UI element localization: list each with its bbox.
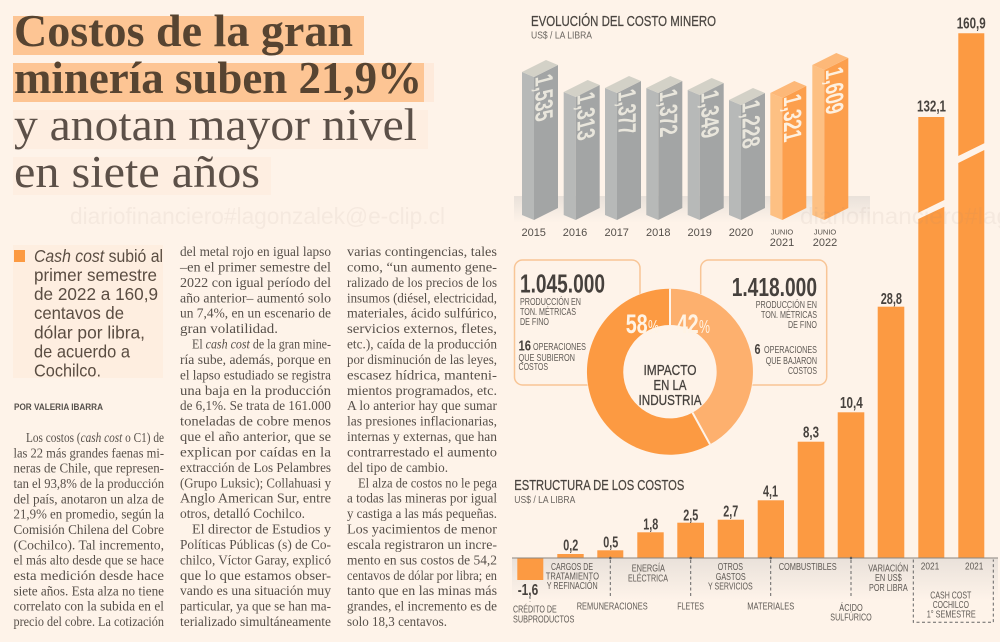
callout: cash cost: dólar por libra,: [34, 322, 145, 342]
bar: junio 2021: [770, 81, 806, 249]
segment: 42%: [670, 289, 753, 444]
body text: column 2: terializado simultáneamente: [180, 614, 331, 629]
title: en siete años: [14, 147, 260, 197]
bar: ácido sulfúrico: ÁCIDO: [839, 601, 863, 614]
bar: junio 2021: JUNIO: [771, 228, 793, 236]
bar: 2016: 2016: [563, 227, 587, 239]
bar: otros gastos y servicios: Y SERVICIOS: [708, 581, 753, 592]
bar: remuneraciones: [577, 534, 648, 612]
callout: cash cost: Cash cost subió al: [34, 246, 163, 266]
dashed bracket: cash cost cochilco: COCHILCO: [933, 600, 969, 611]
callout: cash cost: centavos de: [34, 303, 124, 323]
bar: junio 2022: [812, 53, 848, 249]
subheading: US$ / LA LIBRA: [531, 30, 592, 42]
segment: 58%: [587, 289, 710, 455]
bar: variación en US$ por libra: VARIACIÓN: [868, 562, 908, 575]
body text: column 3: escasez hídrica, manteni-: [347, 367, 498, 382]
body text: column 3: grandes, el incremento es de: [347, 599, 497, 614]
bar: cargos de tratamiento: Y REFINACIÓN: [547, 579, 598, 592]
body text: column 3: internas y externas, que han: [347, 429, 497, 444]
bar: 2020: 1,228: [737, 97, 764, 152]
bar: cash cost 2021: [917, 99, 946, 572]
byline: POR VALERIA IBARRA: [14, 402, 103, 412]
body text: column 1: del país, anotaron un alza de: [14, 491, 164, 506]
body text: column 1: esta medición desde hace: [14, 568, 164, 583]
bar: materiales: 4,1: [763, 484, 778, 501]
callout: cash cost: de 2022 a 160,9: [34, 284, 158, 304]
body text: column 3: por disminución de las leyes,: [347, 352, 497, 367]
body text: column 3: del tipo de cambio.: [347, 460, 448, 475]
bar: cargos de tratamiento: 0,2: [563, 538, 578, 555]
bar: 2015: [521, 60, 558, 239]
bar: otros gastos y servicios: [708, 504, 753, 592]
body text: column 2: el lapso estudiado se registra: [180, 367, 331, 382]
body text: column 3: ralizado de los precios de los: [347, 275, 497, 290]
bar: 2020: [729, 88, 765, 239]
bar: 2020: 2020: [729, 227, 753, 239]
body text: column 2: que lo que estamos obser-: [180, 568, 332, 583]
body text: column 2: ría sube, además, porque en: [180, 352, 331, 367]
body text: column 3: escala registraron un incre-: [347, 537, 498, 552]
donut chart: 58: [626, 309, 648, 339]
center label: IMPACTO: [644, 362, 696, 379]
body text: column 1: 21,9% en promedio, según la: [14, 507, 164, 522]
bar: cargos de tratamiento: CARGOS DE: [551, 562, 593, 573]
bar: remuneraciones: REMUNERACIONES: [577, 601, 648, 612]
bar: cash cost 2022: 2021: [965, 561, 984, 572]
bar: cargos de tratamiento: [546, 538, 599, 592]
bar: variación en US$ por libra: 28,8: [881, 291, 902, 308]
body text: column 3: varias contingencias, tales: [347, 244, 497, 259]
box: right stats: DE FINO: [788, 320, 817, 331]
callout: cash cost: Cochilco.: [34, 360, 101, 380]
body text: column 2: otros, detalló Cochilco.: [180, 506, 305, 521]
body text: column 1: las 22 más grandes faenas mi-: [14, 445, 164, 460]
body text: column 2: 2022 con igual período del: [180, 275, 331, 290]
body text: column 2: vando es una situación muy: [180, 583, 331, 598]
body text: column 1: correlato con la subida en el: [14, 599, 164, 614]
body text: column 2: una baja en la producción: [180, 383, 331, 398]
body text: column 1: [14, 430, 164, 629]
bar: cargos de tratamiento: TRATAMIENTO: [546, 571, 599, 582]
body text: column 3: insumos (diésel, electricidad,: [347, 290, 497, 305]
callout: cash cost: primer semestre: [34, 265, 157, 285]
body text: column 2: chilco, Víctor Garay, explicó: [180, 552, 331, 567]
title: Costos de la gran: [14, 6, 353, 56]
callout: cash cost: de acuerdo a: [34, 342, 130, 362]
bar: cash cost 2021: 132,1: [917, 99, 946, 116]
box: left stats: 16: [518, 338, 531, 355]
box: right stats: 1.418.000: [732, 272, 817, 302]
center label: INDUSTRIA: [638, 392, 702, 409]
body text: column 2: (Grupo Luksic); Collahuasi y: [180, 475, 331, 490]
bar: junio 2022: 1,609: [820, 64, 848, 118]
bar: 2019: 1,349: [696, 87, 723, 142]
heading: ESTRUCTURA DE LOS COSTOS: [514, 477, 684, 494]
body text: column 2: El cash cost de la gran mine-: [192, 336, 331, 352]
bar: 2015: 2015: [521, 227, 546, 239]
donut chart: %: [699, 317, 710, 337]
body text: column 2: extracción de Los Pelambres: [180, 460, 331, 475]
body text: column 1: (Cochilco). Tal incremento,: [14, 537, 164, 552]
bar: 2017: 2017: [604, 227, 629, 239]
panel: estructura de los costos: [512, 15, 998, 625]
body text: column 3: como, “un aumento gene-: [347, 259, 498, 274]
body text: column 2: un 7,4%, en un escenario de: [180, 306, 331, 321]
dashed bracket: cash cost cochilco: [913, 560, 993, 622]
donut chart: [586, 288, 754, 455]
box: left stats: TON. MÉTRICAS: [520, 305, 576, 318]
body text: column 2: gran volatilidad.: [180, 321, 278, 336]
bar: junio 2021: 2021: [770, 237, 794, 249]
body text: column 2: El director de Estudios y: [192, 522, 331, 537]
bar: 2019: 2019: [687, 227, 712, 239]
bar: ácido sulfúrico: [830, 395, 872, 624]
bar: 2018: 2018: [646, 227, 671, 239]
bar: crédito de subproductos: [513, 558, 575, 625]
bar: combustibles: 8,3: [803, 424, 819, 441]
bar: otros gastos y servicios: OTROS: [718, 562, 743, 573]
bar: variación en US$ por libra: EN US$: [875, 573, 902, 584]
subheading: US$ / LA LIBRA: [514, 494, 575, 506]
bar: fletes: 2,5: [683, 508, 699, 525]
body text: column 3: mento en sus costos de 54,2: [347, 552, 497, 567]
body text: column 1: siete años. Esta alza no tiene: [14, 583, 164, 598]
donut chart: 42: [677, 309, 699, 339]
title: minería suben 21,9%: [14, 53, 422, 103]
body text: column 1: Comisión Chilena del Cobre: [14, 522, 164, 537]
body text: column 1: el más alto desde que se hace: [14, 553, 164, 568]
bar: 2018: 1,372: [654, 86, 682, 140]
bar: fletes: FLETES: [677, 601, 704, 612]
body text: column 3: A lo anterior hay que sumar: [347, 398, 497, 413]
bar: crédito de subproductos: -1,6: [518, 582, 538, 599]
body text: column 2: explican por caídas en la: [180, 444, 331, 460]
body text: column 2: [179, 244, 332, 629]
body text: column 2: Políticas Públicas (s) de Co-: [180, 537, 331, 552]
title: [13, 6, 434, 197]
box: left stats: DE FINO: [520, 317, 549, 328]
body text: column 2: toneladas de cobre menos: [180, 414, 331, 429]
center label: [638, 362, 702, 409]
bar: 2017: 1,377: [613, 86, 640, 139]
watermark band: [514, 196, 870, 223]
bar: remuneraciones: 0,5: [603, 534, 619, 551]
bar: combustibles: COMBUSTIBLES: [779, 562, 837, 573]
body text: column 3: materiales, ácido sulfúrico,: [347, 306, 497, 321]
body text: column 2: particular, ya que se han ma-: [180, 599, 331, 614]
icon: orange square: [14, 250, 25, 262]
box: left stats: COSTOS: [518, 362, 548, 373]
bar: combustibles: [779, 424, 837, 573]
body text: column 1: Los costos (cash cost o C1) de: [26, 430, 164, 445]
bar: fletes: [677, 508, 704, 612]
body text: column 3: a todas las mineras por igual: [347, 491, 497, 506]
body text: column 3: Los yacimientos de menor: [347, 522, 498, 537]
body text: column 3: etc.), caída de la producción: [347, 336, 497, 352]
bar: 2016: 1,313: [572, 89, 599, 144]
center label: EN LA: [654, 377, 686, 394]
body text: column 3: centavos de dólar por libra; en: [347, 568, 497, 583]
bar: variación en US$ por libra: POR LIBRA: [869, 583, 908, 594]
bar: 2017: [604, 76, 641, 239]
box: left stats: [514, 260, 640, 385]
body text: column 2: Anglo American Sur, entre: [180, 491, 331, 506]
box: left stats: OPERACIONES: [533, 342, 586, 353]
body text: column 3: tanto que en las minas más: [347, 583, 497, 598]
box: left stats: PRODUCCIÓN EN: [520, 295, 581, 308]
box: left stats: QUE SUBIERON: [518, 353, 575, 364]
bar: energía eléctrica: 1,8: [643, 516, 659, 533]
watermark text right: diariofinanciero#lag: [800, 203, 1000, 229]
box: right stats: 6: [754, 341, 760, 358]
bar: 2016: [563, 80, 600, 239]
bar: 2015: 1,535: [530, 71, 557, 125]
body text: column 3: y castiga a las más pequeñas.: [347, 506, 497, 521]
watermark text: diariofinanciero#lagonzalek@e-clip.cl: [70, 203, 445, 229]
box: right stats: OPERACIONES: [764, 345, 817, 356]
dashed bracket: cash cost cochilco: CASH COST: [930, 590, 971, 601]
callout: cash cost: [13, 245, 163, 380]
body text: column 3: contrarrestado el aumento: [347, 444, 497, 460]
body text: column 1: neras de Chile, que represen-: [14, 461, 164, 476]
body text: column 3: [347, 244, 498, 629]
panel: impacto en la industria: [514, 260, 827, 455]
bar: ácido sulfúrico: 10,4: [840, 395, 863, 412]
body text: column 2: de 6,1%. Se trata de 161.000: [180, 398, 331, 413]
title: y anotan mayor nivel: [14, 100, 417, 150]
bar: junio 2022: 2022: [813, 237, 837, 249]
body text: column 3: mientos programados, etc.: [347, 383, 497, 398]
bar: energía eléctrica: [628, 516, 668, 585]
bar: ácido sulfúrico: SULFÚRICO: [830, 611, 872, 624]
bar: crédito de subproductos: SUBPRODUCTOS: [513, 614, 575, 625]
bar: energía eléctrica: ENERGÍA: [632, 562, 665, 575]
bar: junio 2021: 1,321: [778, 91, 806, 145]
body text: column 2: que el año anterior, que se: [180, 429, 331, 444]
bar: materiales: [747, 484, 795, 612]
body text: column 3: El alza de costos no le pega: [358, 475, 497, 490]
body text: column 2: –en el primer semestre del: [179, 259, 331, 274]
box: right stats: COSTOS: [788, 366, 817, 377]
box: right stats: [701, 260, 827, 385]
body text: column 1: precio del cobre. La cotización: [14, 614, 164, 629]
panel: evolución del costo minero: [521, 13, 848, 249]
bar: otros gastos y servicios: 2,7: [723, 504, 738, 521]
bar: 2018: [646, 76, 682, 239]
bar: energía eléctrica: ELÉCTRICA: [628, 572, 668, 585]
box: right stats: TON. MÉTRICAS: [761, 308, 817, 321]
bar: cash cost 2022: [957, 15, 986, 572]
bar: junio 2022: JUNIO: [814, 228, 836, 236]
box: right stats: QUE BAJARON: [766, 356, 817, 367]
bar: materiales: MATERIALES: [747, 601, 795, 612]
bar: variación en US$ por libra: [868, 291, 908, 594]
body text: column 3: solo 18,3 centavos.: [347, 614, 447, 629]
heading: EVOLUCIÓN DEL COSTO MINERO: [531, 13, 716, 30]
body text: column 3: servicios externos, fletes,: [347, 321, 497, 336]
body text: column 2: del metal rojo en igual lapso: [180, 244, 331, 259]
body text: column 2: año anterior– aumentó solo: [180, 290, 331, 305]
bar: cash cost 2022: 160,9: [957, 15, 986, 32]
bar: otros gastos y servicios: GASTOS: [716, 572, 746, 583]
body text: column 3: las presiones inflacionarias,: [347, 414, 497, 429]
bar: cash cost 2021: 2021: [921, 561, 940, 572]
dashed bracket: cash cost cochilco: 1° SEMESTRE: [927, 610, 976, 621]
donut chart: %: [648, 317, 659, 337]
box: right stats: PRODUCCIÓN EN: [756, 298, 817, 311]
box: left stats: 1.045.000: [520, 269, 605, 299]
bar: 2019: [687, 78, 724, 239]
bar: crédito de subproductos: CRÉDITO DE: [513, 603, 557, 616]
body text: column 1: tan el 93,8% de la producción: [14, 476, 164, 491]
